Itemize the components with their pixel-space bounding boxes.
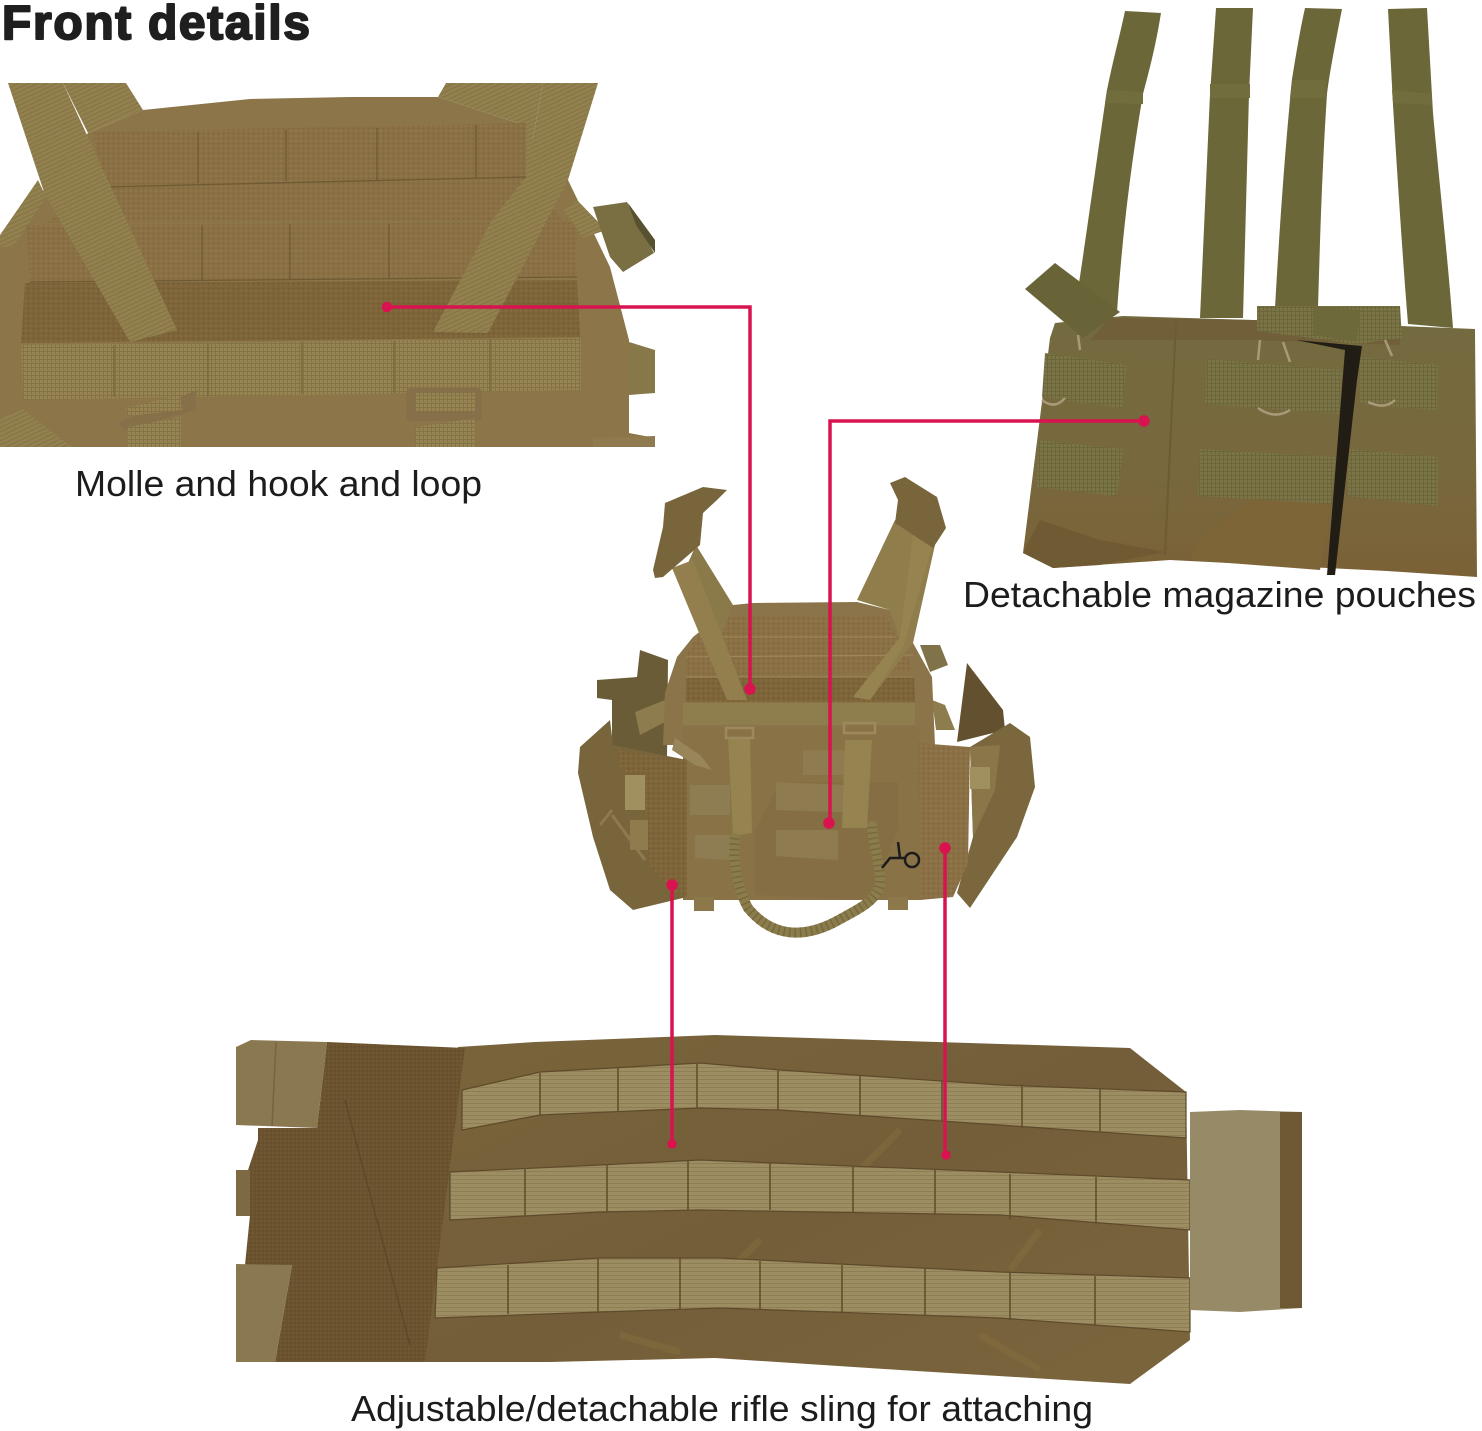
left shoulder strap back bbox=[685, 545, 733, 640]
fabric folds bbox=[620, 1130, 1040, 1370]
right pouch bbox=[957, 723, 1035, 908]
left rear pack bbox=[597, 650, 668, 760]
webbing E bbox=[1198, 449, 1335, 504]
left cummerbund and pouch bbox=[578, 720, 687, 910]
strap 1 bbox=[1078, 11, 1161, 312]
back panel bbox=[663, 602, 935, 745]
strap fold marks bbox=[1105, 80, 1432, 105]
velcro stitching bbox=[30, 125, 577, 282]
right buckle bbox=[406, 388, 482, 421]
right tab bbox=[564, 200, 606, 238]
left lower strap bbox=[128, 417, 181, 447]
right lower strap bbox=[415, 418, 476, 447]
third velcro row bbox=[27, 222, 577, 282]
callout line: molle and hook and loop bbox=[384, 304, 754, 693]
webbing row 2 bbox=[450, 1160, 1190, 1230]
panel: detachable magazine pouches photo bbox=[1023, 8, 1477, 577]
right shoulder strap bbox=[433, 83, 598, 333]
webbing D bbox=[1037, 440, 1123, 496]
bungee sling bbox=[734, 826, 880, 933]
label: detachable magazine pouches: Detachable magazine pouches bbox=[963, 574, 1476, 615]
dark hook and loop strip bbox=[21, 280, 580, 343]
webbing row 1 bbox=[462, 1063, 1186, 1138]
left buckle bbox=[118, 390, 197, 430]
buckles bbox=[726, 723, 875, 738]
horizontal webbing bbox=[683, 703, 915, 725]
left vertical strap bbox=[728, 737, 752, 836]
centre pouch fold bbox=[1165, 322, 1176, 555]
right shoulder pad bbox=[890, 477, 946, 548]
magazine pouch body bbox=[1023, 316, 1477, 577]
shoulder webbing behind bbox=[63, 83, 143, 133]
panel: molle and hook and loop photo bbox=[0, 83, 655, 447]
panel: cummerbund photo bbox=[236, 1035, 1302, 1384]
left side strap bbox=[0, 180, 46, 247]
right velcro panel bbox=[918, 743, 970, 900]
horizontal molle webbing bbox=[21, 338, 581, 400]
webbing B bbox=[1205, 359, 1342, 414]
lower left tab bbox=[236, 1264, 292, 1362]
velcro rows bbox=[686, 615, 913, 676]
left shoulder strap bbox=[8, 83, 177, 342]
cummerbund body bbox=[420, 1035, 1190, 1384]
right vertical strap bbox=[842, 740, 872, 828]
strap 3 bbox=[1275, 8, 1342, 308]
webbing row 3 bbox=[435, 1258, 1190, 1332]
velcro section bbox=[245, 1042, 465, 1362]
callout line: cummerbund right bbox=[941, 844, 949, 1158]
webbing stitches bbox=[508, 1064, 1100, 1326]
middle velcro row bbox=[45, 177, 562, 223]
panel: plate carrier vest bbox=[578, 477, 1035, 933]
side cord bbox=[600, 810, 645, 860]
elastic velcro end bbox=[1280, 1112, 1302, 1308]
middle left tab bbox=[236, 1170, 250, 1216]
callout line: magazine pouches bbox=[825, 417, 1148, 827]
vest feet tabs bbox=[694, 897, 714, 911]
left velcro panel bbox=[617, 750, 687, 897]
black snap hook bbox=[882, 842, 919, 868]
top left tab bbox=[236, 1040, 327, 1128]
right flap bbox=[957, 663, 1005, 742]
strap 2 bbox=[1200, 8, 1253, 318]
left shoulder pad bbox=[653, 487, 727, 578]
pouch bottom folds bbox=[1023, 520, 1165, 568]
webbing A bbox=[1042, 353, 1127, 408]
flap tab bbox=[1025, 263, 1120, 338]
webbing C bbox=[1360, 357, 1438, 410]
bottom left strap bbox=[0, 408, 72, 447]
rolled side strap bbox=[593, 202, 654, 272]
right shoulder front strap bbox=[853, 535, 932, 700]
elastic extension bbox=[1190, 1110, 1302, 1312]
right shoulder strap bbox=[853, 520, 935, 700]
black elastic strip bbox=[1296, 340, 1362, 575]
velcro fold line bbox=[345, 1100, 410, 1345]
bottom right band bbox=[593, 436, 655, 447]
lower right tab bbox=[629, 342, 655, 395]
metal D rings bbox=[1042, 335, 1395, 415]
right side tabs bbox=[920, 645, 948, 672]
label: molle and hook and loop: Molle and hook and loop bbox=[75, 463, 482, 504]
centre pockets bbox=[755, 782, 898, 900]
front lower panel bbox=[683, 727, 922, 900]
strap 4 bbox=[1388, 8, 1453, 328]
callout line: cummerbund left bbox=[668, 881, 676, 1147]
vest body bbox=[0, 97, 655, 447]
left shoulder front strap bbox=[672, 560, 747, 700]
inner rim bbox=[1090, 318, 1400, 345]
webbing F bbox=[1347, 449, 1438, 506]
top velcro row bbox=[93, 123, 526, 187]
label: adjustable rifle sling: Adjustable/detachable rifle sling for attaching bbox=[351, 1388, 1093, 1429]
top band bbox=[1257, 306, 1402, 344]
